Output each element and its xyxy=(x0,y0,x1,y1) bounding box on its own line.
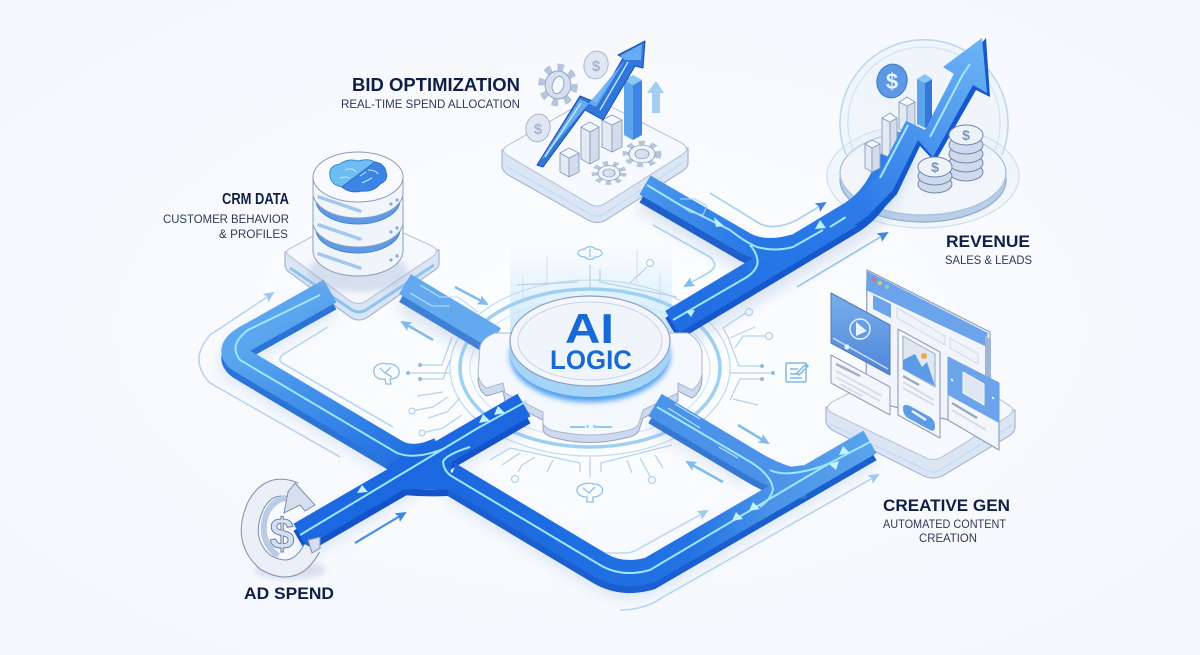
panel: creative platform xyxy=(826,354,1015,478)
thin flow lines and small arrows xyxy=(199,193,887,610)
label: revenue xyxy=(945,232,1032,267)
coin stack right xyxy=(949,125,983,181)
gear large xyxy=(541,67,575,103)
panel: bid optimization illustration xyxy=(523,41,664,183)
panel: bid optimization illustration: $ xyxy=(592,58,601,75)
label: bid optimization: REAL-TIME SPEND ALLOCATION xyxy=(341,99,520,111)
icon: ad spend dollar: $ xyxy=(270,510,294,559)
pipe tops xyxy=(234,291,440,457)
label: creative gen xyxy=(883,496,1010,545)
panel: revenue illustration: $ xyxy=(962,127,970,143)
label: revenue: SALES & LEADS xyxy=(945,255,1032,267)
phone card xyxy=(898,329,940,438)
panel: bid platform xyxy=(502,99,688,222)
video card xyxy=(831,293,890,375)
label: CRM data xyxy=(163,191,289,241)
label: revenue: REVENUE xyxy=(946,232,1030,251)
icon: brain xyxy=(330,160,387,192)
text card xyxy=(831,355,890,415)
hub rings and circuit traces xyxy=(406,240,775,484)
label: creative gen: CREATIVE GEN xyxy=(883,496,1010,515)
label: creative gen: CREATION xyxy=(919,533,977,545)
label: CRM data: CRM DATA xyxy=(222,191,289,208)
coin stack left xyxy=(918,157,952,193)
label: CRM data: & PROFILES xyxy=(219,229,288,241)
panel: revenue illustration: $ xyxy=(931,159,939,175)
panel: revenue illustration: $ xyxy=(886,69,898,94)
zigzag arrow xyxy=(537,41,645,167)
pipes: upper network xyxy=(405,135,905,348)
pipe sides xyxy=(234,298,440,464)
panel: AI logic hub: LOGIC xyxy=(550,345,632,375)
coins xyxy=(581,48,611,82)
label: bid optimization xyxy=(341,75,520,111)
pipe light lines xyxy=(236,295,443,456)
hub top disc xyxy=(510,296,670,386)
label: creative gen: AUTOMATED CONTENT xyxy=(883,519,1006,531)
panel: CRM platform xyxy=(285,214,439,320)
hub glow ring xyxy=(510,310,670,402)
hub base xyxy=(478,340,702,442)
dome xyxy=(840,40,1008,155)
pipes: lower network xyxy=(234,291,870,583)
label: bid optimization: BID OPTIMIZATION xyxy=(352,75,520,95)
hub text: AI xyxy=(565,305,614,352)
browser window xyxy=(866,270,991,430)
icon: ad spend dollar xyxy=(250,483,326,579)
panel: revenue base xyxy=(827,124,1019,228)
panel: revenue illustration xyxy=(838,38,1008,226)
gears small xyxy=(626,143,658,165)
growth arrow xyxy=(855,38,990,226)
icon: memo xyxy=(786,363,808,382)
panel: creative illustration xyxy=(831,270,999,450)
icon: CRM database xyxy=(308,152,408,292)
panel: AI logic hub xyxy=(478,296,702,442)
dollar coin xyxy=(873,61,911,101)
bars xyxy=(865,97,915,172)
label: CRM data: CUSTOMER BEHAVIOR xyxy=(163,214,289,226)
up arrow xyxy=(647,81,664,113)
carousel card xyxy=(948,357,999,450)
label: ad spend: AD SPEND xyxy=(244,584,334,603)
icon: brain left xyxy=(374,363,399,384)
icon: brain bottom xyxy=(577,483,603,502)
icon: cloud top xyxy=(578,247,602,259)
bars xyxy=(560,115,622,177)
panel: bid optimization illustration: $ xyxy=(534,121,543,138)
